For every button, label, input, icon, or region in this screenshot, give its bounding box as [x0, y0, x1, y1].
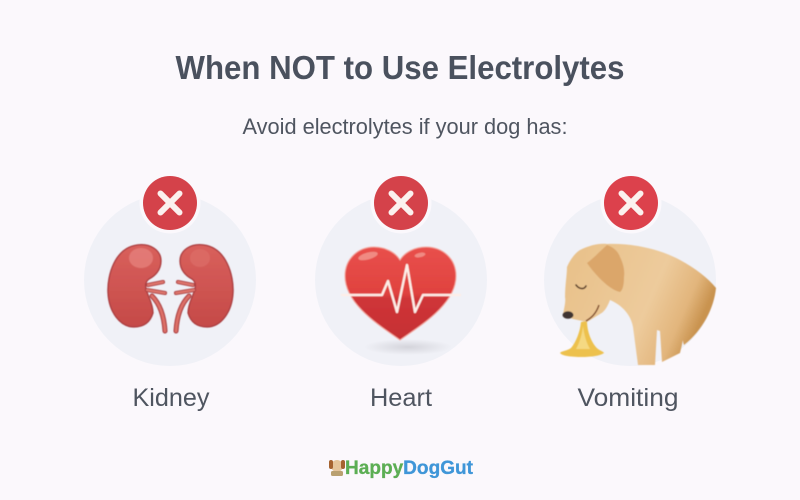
icon: dog logo: [329, 460, 345, 476]
panel: kidney: [84, 172, 256, 412]
label: Kidney: Kidney: [132, 384, 210, 412]
vomit highlight: [576, 326, 590, 349]
logo: [329, 458, 474, 479]
panel: vomiting: [544, 172, 716, 412]
icon backdrop: kidney: [84, 194, 256, 366]
right kidney: [176, 245, 233, 331]
subtitle: Avoid electrolytes if your dog has:: [242, 114, 568, 139]
vomit puddle: [560, 321, 604, 357]
dog eye: [576, 285, 586, 289]
icon backdrop: heart: [315, 194, 487, 366]
label: Vomiting: Vomiting: [578, 384, 678, 412]
dog ear: [587, 245, 624, 292]
label: Heart: Heart: [370, 384, 432, 412]
panel: heart: [315, 172, 487, 412]
icon: heart: [342, 247, 460, 340]
dog nose: [562, 311, 574, 319]
badge: X: [140, 172, 200, 234]
icon: dog vomiting: [560, 244, 716, 365]
shadow: [364, 339, 452, 355]
dog mouth: [586, 305, 599, 321]
title: When NOT to Use Electrolytes: [176, 49, 624, 86]
dog body: [563, 244, 716, 365]
badge: X: [600, 172, 662, 234]
left kidney: [108, 245, 165, 331]
badge: X: [370, 172, 432, 234]
wordmark: HappyDogGut: [345, 458, 474, 479]
icon backdrop: vomiting: [544, 194, 716, 366]
icon: kidneys: [108, 245, 233, 331]
